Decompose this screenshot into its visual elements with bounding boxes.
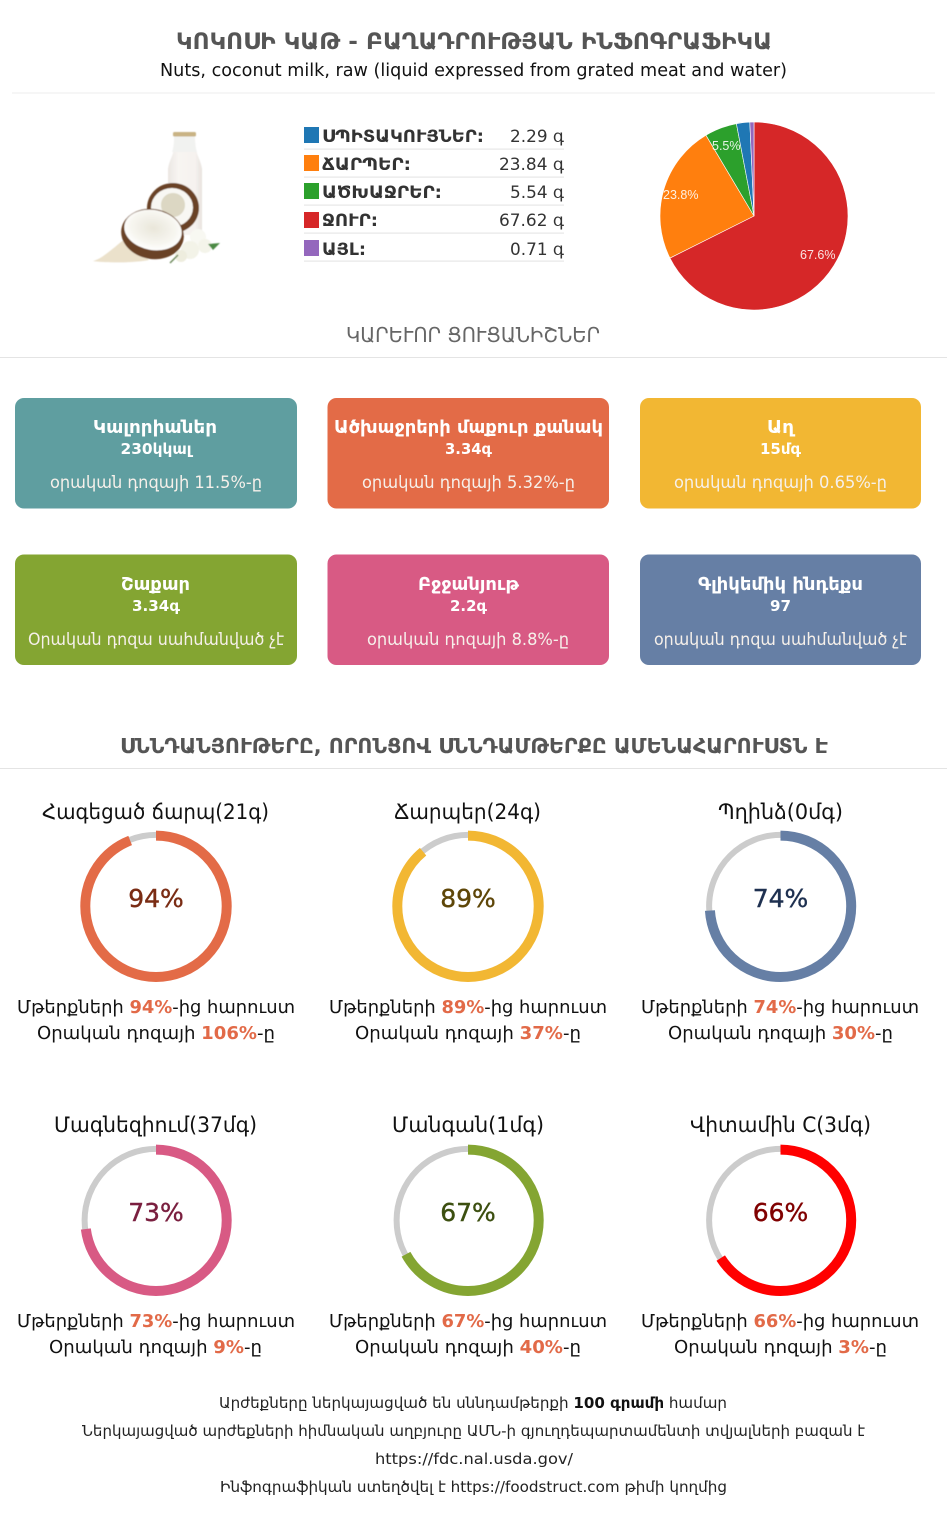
- legend row: fats: ՃԱՐՊԵՐ:: [322, 155, 411, 175]
- image: coconut milk bottle and coconut halves: [93, 132, 220, 264]
- footer notes: [82, 1394, 865, 1496]
- nutrient: magnesium: Մագնեզիում(37մգ): [54, 1113, 257, 1137]
- nutrient: manganese: 67%: [440, 1198, 496, 1227]
- legend row: other: ԱՅԼ:: [322, 240, 366, 260]
- nutrient: fats: 89%: [440, 884, 496, 913]
- card: net carbs: օրական դոզայի 5.32%-ը: [362, 473, 575, 492]
- footer notes: https://fdc.nal.usda.gov/: [375, 1450, 574, 1468]
- card: sugar: Շաքար: [121, 574, 190, 595]
- header: [160, 30, 787, 81]
- nutrient: copper: Օրական դոզայի 30%-ը: [668, 1023, 893, 1044]
- nutrient: fats: Օրական դոզայի 37%-ը: [355, 1023, 581, 1044]
- nutrient: fats: Մթերքների 89%-ից հարուստ: [329, 997, 607, 1018]
- card: salt: 15մգ: [760, 440, 801, 458]
- footer notes: Ներկայացված արժեքների հիմնական աղբյուրը ԱՄՆ-ի գյուղդեպարտամենտի տվյալների բազան է: [82, 1422, 865, 1440]
- nutrient: saturated fat: Օրական դոզայի 106%-ը: [37, 1023, 275, 1044]
- card: sugar: [15, 554, 297, 665]
- card: salt: օրական դոզայի 0.65%-ը: [674, 473, 887, 492]
- card: fiber: Բջջանյութ: [418, 574, 519, 595]
- legend row: proteins: [304, 127, 565, 147]
- nutrient: saturated fat: [17, 800, 295, 1044]
- card: glycemic index: 97: [770, 597, 791, 615]
- legend row: fats: 23.84 գ: [499, 155, 565, 175]
- legend table: [304, 127, 565, 262]
- card: glycemic index: օրական դոզա սահմանված չէ: [654, 630, 907, 649]
- nutrient: magnesium: [17, 1113, 295, 1358]
- nutrient: fats: Ճարպեր(24գ): [394, 800, 541, 824]
- legend row: water: ՋՈՒՐ:: [322, 211, 378, 231]
- pie chart: [660, 122, 848, 310]
- pie chart: 67.6%: [800, 248, 835, 262]
- card: net carbs: Ածխաջրերի մաքուր քանակ: [334, 417, 603, 438]
- nutrient: saturated fat: Մթերքների 94%-ից հարուստ: [17, 997, 295, 1018]
- nutrient: vitamin C: Մթերքների 66%-ից հարուստ: [641, 1311, 919, 1332]
- legend row: carbohydrates: ԱԾԽԱՋՐԵՐ:: [322, 183, 442, 203]
- card: glycemic index: [640, 554, 921, 665]
- card: net carbs: [328, 398, 609, 508]
- nutrient: manganese: Օրական դոզայի 40%-ը: [355, 1337, 581, 1358]
- card: calories: 230կկալ: [120, 440, 194, 458]
- nutrient: copper: 74%: [753, 884, 808, 913]
- nutrient: manganese: Մանգան(1մգ): [392, 1113, 544, 1137]
- nutrient: copper: Պղինձ(0մգ): [718, 800, 843, 824]
- nutrient: copper: [641, 800, 919, 1044]
- card: sugar: Օրական դոզա սահմանված չէ: [28, 630, 284, 649]
- card: glycemic index: Գլիկեմիկ ինդեքս: [698, 574, 863, 595]
- card: calories: օրական դոզայի 11.5%-ը: [50, 473, 262, 492]
- nutrient: saturated fat: Հագեցած ճարպ(21գ): [42, 800, 269, 824]
- card: salt: [640, 398, 921, 508]
- legend row: carbohydrates: [304, 183, 565, 203]
- nutrient: manganese: Մթերքների 67%-ից հարուստ: [329, 1311, 607, 1332]
- nutrient: copper: Մթերքների 74%-ից հարուստ: [641, 997, 919, 1018]
- nutrient: vitamin C: Օրական դոզայի 3%-ը: [674, 1337, 887, 1358]
- legend row: fats: [304, 155, 565, 175]
- nutrient: manganese: [329, 1113, 607, 1358]
- nutrient: vitamin C: [641, 1113, 919, 1358]
- title: ԿՈԿՈՍԻ ԿԱԹ - ԲԱՂԱԴՐՈՒԹՅԱՆ ԻՆՖՈԳՐԱՖԻԿԱ: [176, 30, 772, 55]
- legend row: carbohydrates: 5.54 գ: [510, 183, 565, 203]
- footer notes: Արժեքները ներկայացված են սննդամթերքի 100 գրամի համար: [219, 1394, 727, 1412]
- footer notes: Ինֆոգրաֆիկան ստեղծվել է https://foodstruct.com թիմի կողմից: [220, 1478, 727, 1496]
- nutrient: magnesium: Օրական դոզայի 9%-ը: [49, 1337, 262, 1358]
- nutrient: vitamin C: Վիտամին C(3մգ): [690, 1113, 871, 1137]
- card: fiber: 2.2գ: [450, 597, 487, 615]
- pie chart: 23.8%: [663, 188, 698, 202]
- card: salt: Աղ: [767, 417, 795, 438]
- card: calories: Կալորիաներ: [93, 417, 217, 438]
- card: sugar: 3.34գ: [132, 597, 180, 615]
- heading: key indicators: ԿԱՐԵՒՈՐ ՑՈՒՑԱՆԻՇՆԵՐ: [346, 323, 600, 347]
- legend row: other: 0.71 գ: [510, 240, 565, 260]
- nutrient: saturated fat: 94%: [128, 884, 184, 913]
- heading: richest nutrients: ՍՆՆԴԱՆՅՈՒԹԵՐԸ, ՈՐՈՆՑՈՎ ՍՆՆԴԱՄԹԵՐՔԸ ԱՄԵՆԱՀԱՐՈՒՍՏՆ Է: [120, 734, 828, 758]
- card: net carbs: 3.34գ: [445, 440, 492, 458]
- nutrient: magnesium: Մթերքների 73%-ից հարուստ: [17, 1311, 295, 1332]
- nutrient: fats: [329, 800, 607, 1044]
- legend row: water: 67.62 գ: [499, 211, 565, 231]
- legend row: proteins: ՍՊԻՏԱԿՈՒՅՆԵՐ:: [322, 127, 484, 147]
- card: fiber: օրական դոզայի 8.8%-ը: [367, 630, 569, 649]
- legend row: other: [304, 240, 565, 260]
- nutrient: vitamin C: 66%: [753, 1198, 808, 1227]
- legend row: water: [304, 211, 565, 231]
- nutrient: magnesium: 73%: [128, 1198, 184, 1227]
- subtitle: Nuts, coconut milk, raw (liquid expressed from grated meat and water): [160, 60, 787, 81]
- pie chart: 5.5%: [712, 139, 740, 153]
- card: calories: [15, 398, 297, 508]
- card: fiber: [328, 554, 609, 665]
- legend row: proteins: 2.29 գ: [510, 127, 565, 147]
